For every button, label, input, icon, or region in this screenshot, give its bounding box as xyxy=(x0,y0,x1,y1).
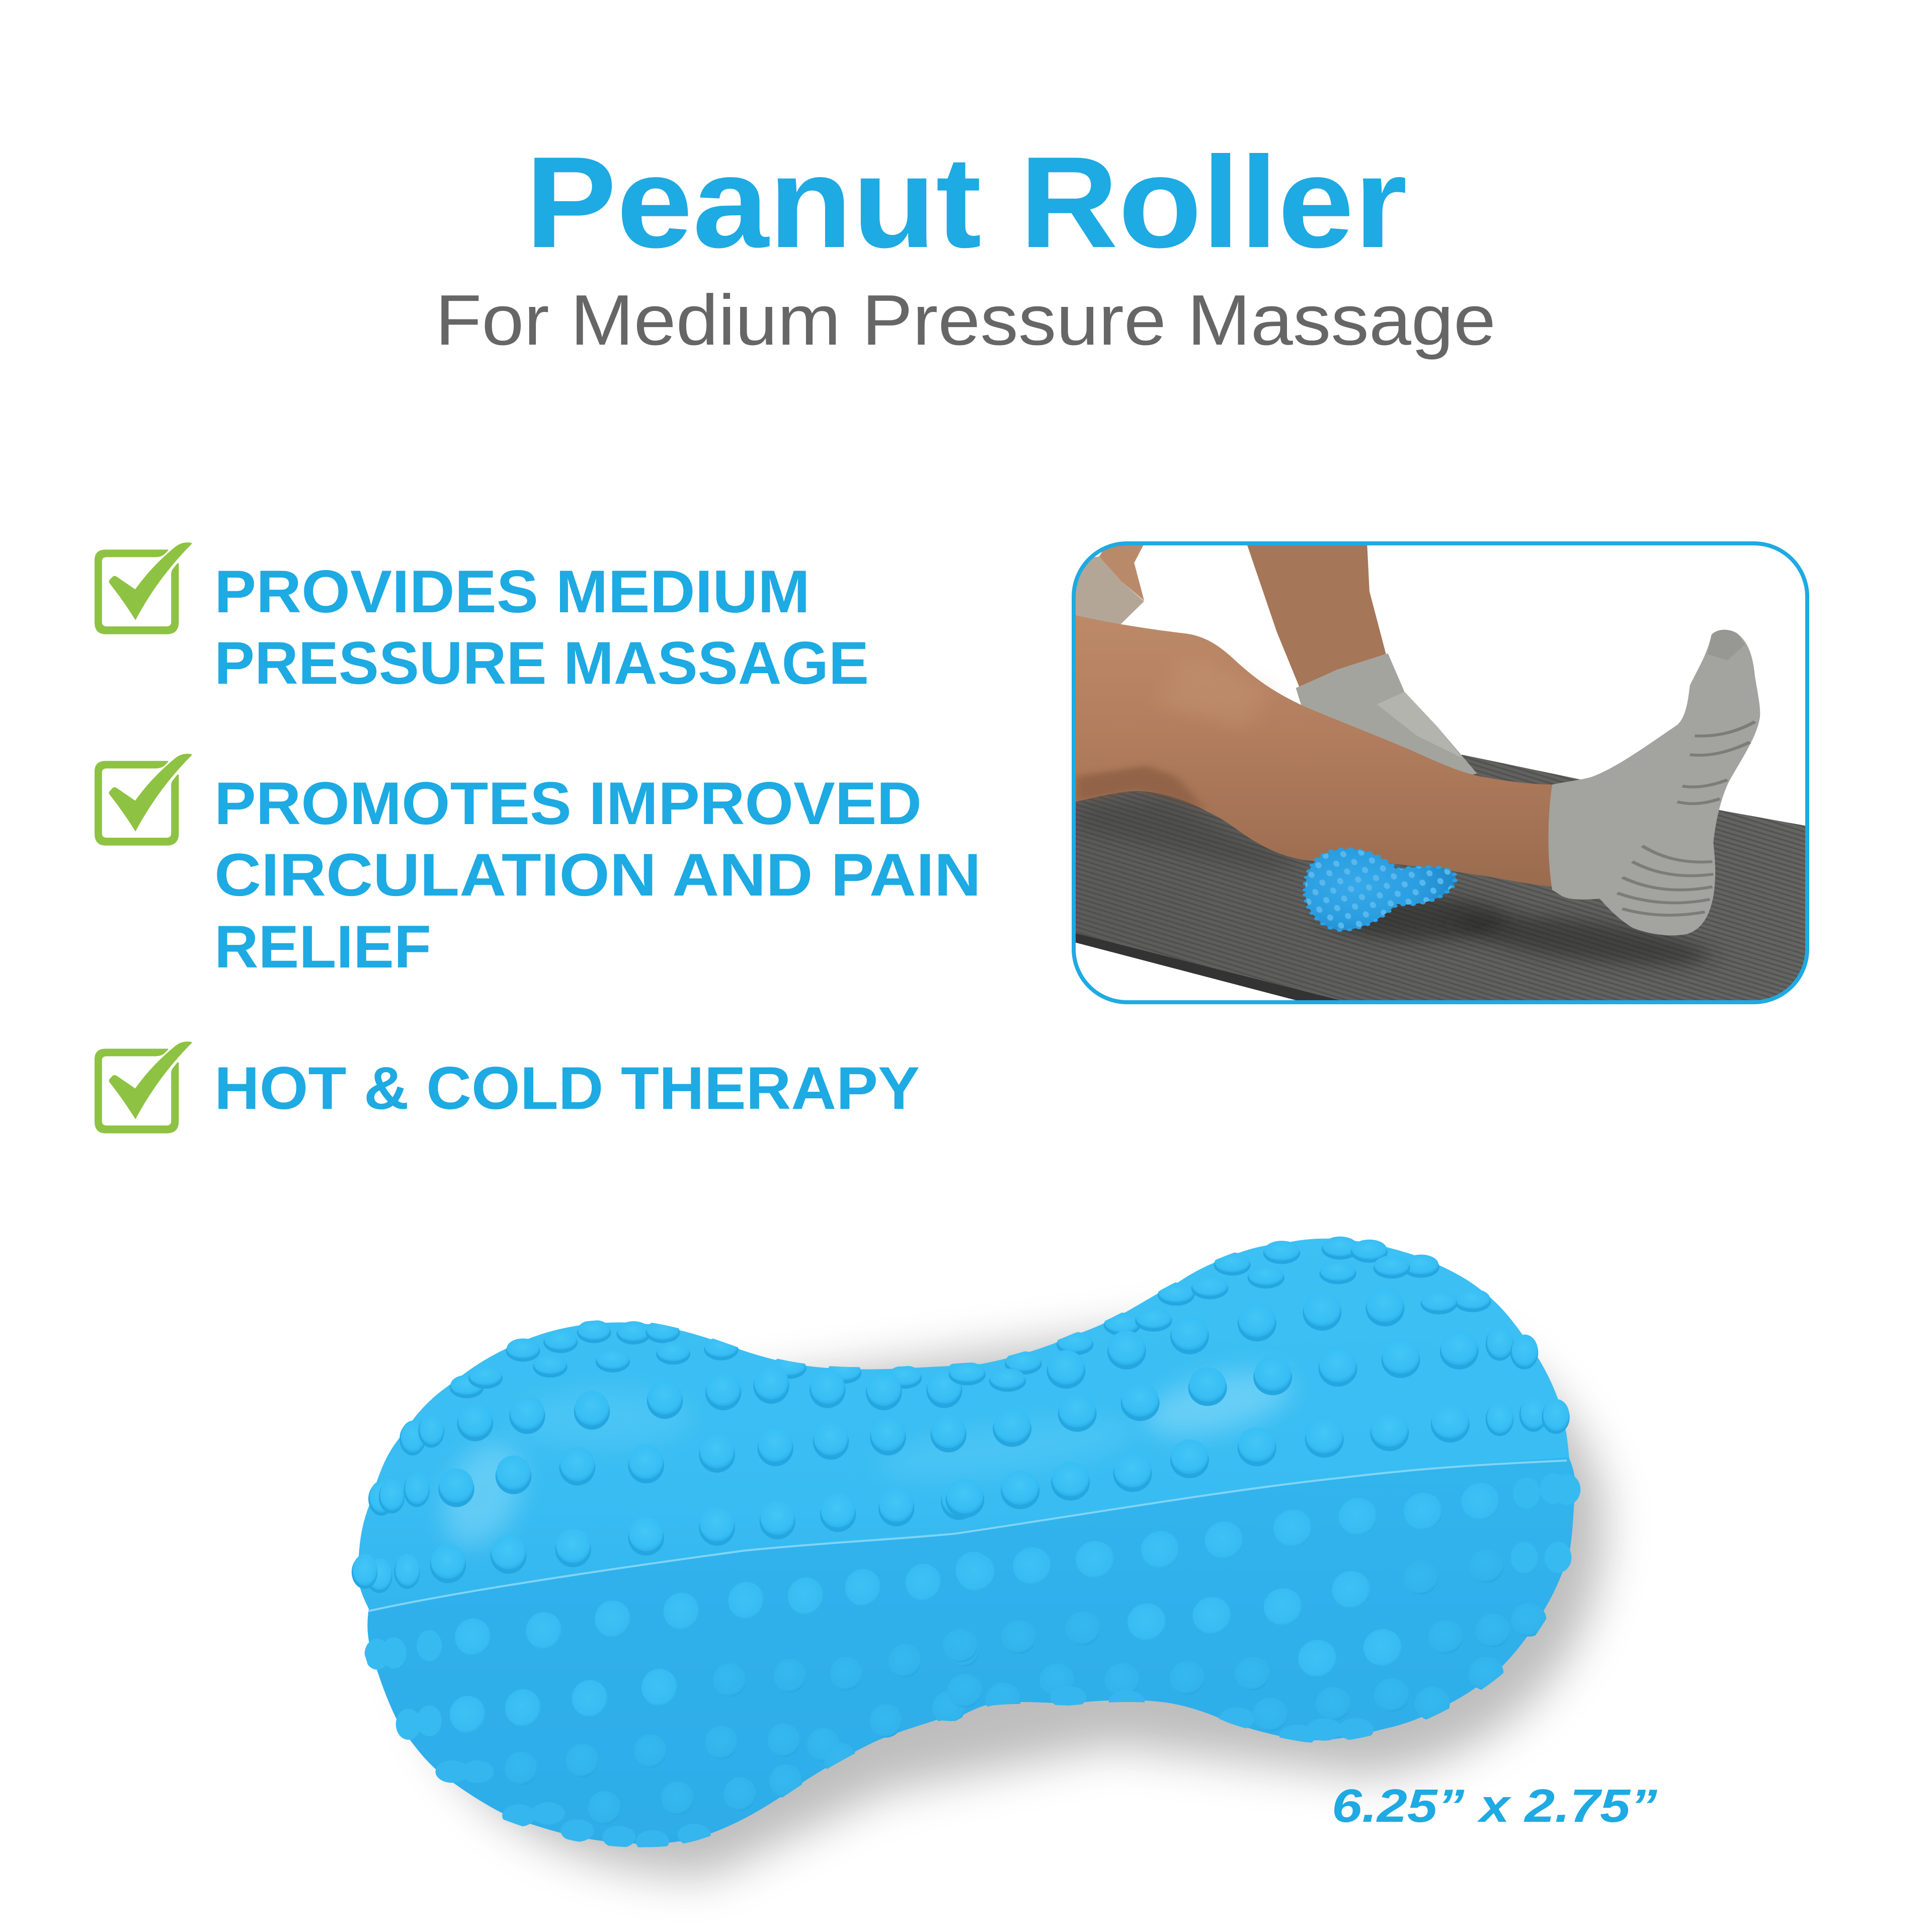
benefit text: RELIEF xyxy=(214,913,431,981)
bumps left half xyxy=(352,1320,992,1853)
photo panel: leg on roller xyxy=(1067,541,1812,1003)
benefit: circulation and pain relief xyxy=(95,754,981,981)
back leg xyxy=(1246,541,1386,687)
seam line xyxy=(369,1461,1567,1611)
benefit: hot and cold therapy xyxy=(95,1041,920,1134)
bumps right half xyxy=(943,1237,1580,1747)
yoga mat xyxy=(1067,755,1812,1003)
benefit: medium pressure massage xyxy=(95,542,869,697)
benefit text: HOT & COLD THERAPY xyxy=(214,1055,920,1122)
benefit text: CIRCULATION AND PAIN xyxy=(214,841,981,909)
back sock xyxy=(1296,654,1477,780)
small blue roller xyxy=(1305,849,1456,930)
icon: green checkbox xyxy=(95,1041,192,1134)
product: blue peanut roller xyxy=(347,1228,1605,1877)
title: Peanut Roller xyxy=(525,129,1407,275)
front leg xyxy=(1067,613,1555,887)
shorts xyxy=(1076,556,1144,624)
benefit text: PROVIDES MEDIUM xyxy=(214,558,810,625)
benefit text: PRESSURE MASSAGE xyxy=(214,629,869,697)
benefit text xyxy=(214,558,869,697)
dimensions label: 6.25” x 2.75” xyxy=(1332,1780,1658,1832)
lower half tone xyxy=(352,1457,1580,1862)
highlights xyxy=(428,1429,538,1559)
front sock foot xyxy=(1549,630,1760,935)
icon: green checkbox xyxy=(95,754,192,846)
roller bumps xyxy=(352,1237,1580,1853)
icon: green checkbox xyxy=(95,542,192,634)
benefit text xyxy=(214,770,981,981)
subtitle: For Medium Pressure Massage xyxy=(435,280,1496,360)
roller shadow xyxy=(413,1303,1605,1877)
benefit text: PROMOTES IMPROVED xyxy=(214,770,922,837)
photo frame xyxy=(1074,543,1807,1002)
roller body xyxy=(347,1228,1585,1862)
